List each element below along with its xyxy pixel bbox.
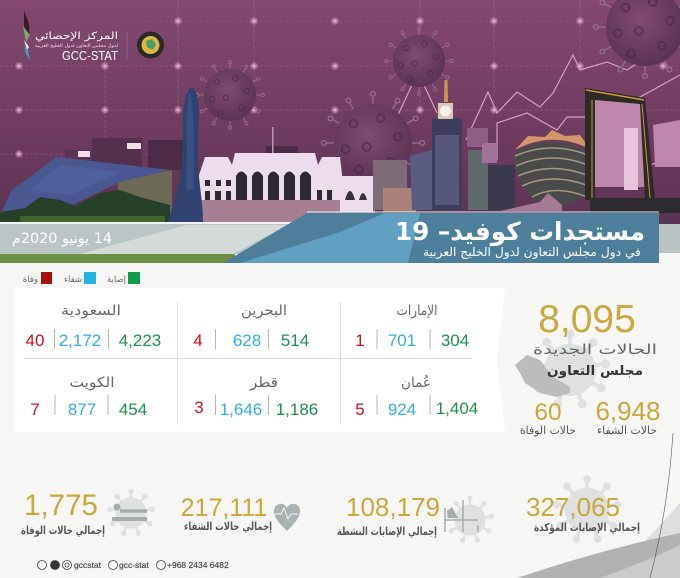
Saudi Arabia: 2,172 xyxy=(59,331,101,350)
Kuwait: 7 xyxy=(30,400,40,419)
UAE xyxy=(355,303,469,350)
Oman: 1,404 xyxy=(436,399,478,418)
panel: new cases summary: حالات الوفاة xyxy=(520,424,576,437)
footer: social contacts xyxy=(38,560,229,570)
footer: social contacts: gccstat xyxy=(74,560,102,570)
UAE: 304 xyxy=(441,331,469,350)
hero banner: skyline scene xyxy=(0,0,680,224)
Saudi Arabia xyxy=(26,303,161,350)
stat: total recoveries: إجمالي حالات الشفاء xyxy=(184,520,272,533)
subtitle: في دول مجلس التعاون لدول الخليج العربية xyxy=(423,245,641,260)
Bahrain: 628 xyxy=(233,331,261,350)
Bahrain: 4 xyxy=(193,331,203,350)
Kuwait xyxy=(30,375,147,419)
Oman xyxy=(355,375,478,419)
Qatar: 3 xyxy=(194,398,204,417)
decorative swoosh xyxy=(517,433,680,578)
panel: new cases summary: حالات الشفاء xyxy=(597,424,657,437)
Qatar: 1,646 xyxy=(220,400,262,419)
legend: شفاء xyxy=(64,275,82,285)
title banner xyxy=(223,212,659,263)
footer: social contacts: +968 2434 6482 xyxy=(167,560,229,570)
stat: total deaths: إجمالي حالات الوفاة xyxy=(21,524,105,537)
stat: confirmed cases: 327,065 xyxy=(526,492,620,522)
viruses xyxy=(196,61,264,129)
Kuwait building xyxy=(0,157,172,222)
Saudi Arabia: السعودية xyxy=(61,303,121,319)
UAE: الإمارات xyxy=(396,303,438,319)
logo: GCC-STAT: المركز الإحصائي xyxy=(35,31,118,42)
panel: new cases summary: مجلس التعاون xyxy=(547,364,643,379)
legend: وفاة xyxy=(23,275,38,285)
Qatar: قطر xyxy=(249,375,278,391)
stat: total recoveries: 217,111 xyxy=(181,494,267,522)
UAE: 701 xyxy=(388,331,416,350)
icon: virus xyxy=(552,475,622,544)
logo: GCC-STAT: GCC-STAT xyxy=(62,48,118,63)
Oman: عُمان xyxy=(401,375,431,391)
chart lines xyxy=(397,43,680,180)
Saudi Arabia: 40 xyxy=(26,331,44,350)
Kuwait: 454 xyxy=(119,400,147,419)
panel: new cases summary: 6,948 xyxy=(595,396,661,426)
icon: virus and GCC map xyxy=(515,330,611,410)
icon: GCC emblem xyxy=(137,32,164,58)
UAE: 1 xyxy=(355,331,365,350)
Qatar: 1,186 xyxy=(276,400,318,419)
stat: active cases: إجمالي الإصابات النشطة xyxy=(337,525,437,538)
icon: hospital bed xyxy=(445,496,494,544)
title: مستجدات كوفيد– 19 xyxy=(395,217,645,247)
Kuwait: 877 xyxy=(68,400,96,419)
Bahrain xyxy=(193,303,309,350)
stat: active cases: 108,179 xyxy=(346,492,440,522)
legend: إصابة xyxy=(107,275,126,285)
logo: GCC-STAT: لدول مجلس التعاون لدول الخليج العربية xyxy=(35,44,118,49)
stat: confirmed cases: إجمالي الإصابات المؤكدة xyxy=(534,521,640,534)
stat: active cases xyxy=(337,492,494,544)
Dubai frame xyxy=(585,88,680,213)
Oman palace xyxy=(199,153,375,222)
panel: new cases summary: 60 xyxy=(534,399,562,426)
Oman: 5 xyxy=(355,400,365,419)
footer: social contacts: gcc-stat xyxy=(119,560,149,570)
stat: total deaths xyxy=(21,489,155,537)
date band xyxy=(0,222,680,263)
panel: new cases summary: 8,095 xyxy=(538,298,636,341)
panel: new cases summary xyxy=(515,298,661,437)
panel: country statistics xyxy=(14,288,505,432)
Makkah clock tower xyxy=(340,80,515,212)
stat: total recoveries xyxy=(181,494,300,533)
Bahrain: 514 xyxy=(281,331,309,350)
legend xyxy=(23,272,140,285)
Kuwait: الكويت xyxy=(70,375,114,391)
stat: confirmed cases xyxy=(526,475,640,544)
Saudi Arabia: 4,223 xyxy=(119,331,161,350)
panel: new cases summary: الحالات الجديدة xyxy=(533,342,657,358)
distant buildings xyxy=(65,127,298,170)
Qatar torch tower xyxy=(168,87,203,222)
Bahrain round building xyxy=(500,130,590,211)
icon: patient in bed xyxy=(107,489,155,537)
stat: total deaths: 1,775 xyxy=(24,489,98,522)
Bahrain: البحرين xyxy=(241,303,287,319)
logo: GCC-STAT xyxy=(23,11,127,63)
Qatar xyxy=(194,375,318,419)
Oman: 924 xyxy=(388,400,416,419)
date: 14 يونيو 2020م xyxy=(12,231,112,247)
icon: heart xyxy=(274,504,300,531)
